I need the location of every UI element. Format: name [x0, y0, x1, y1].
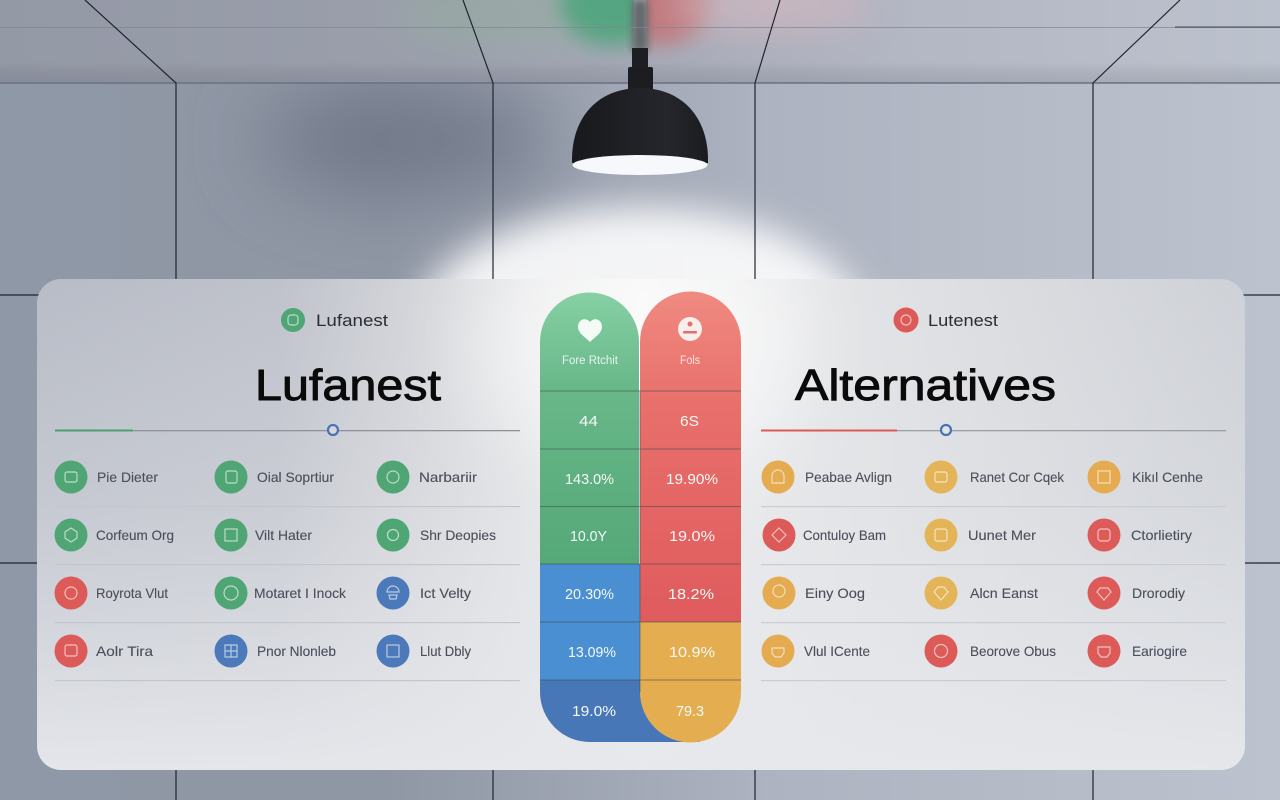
item: Beorove Obus [924, 634, 1056, 668]
item: Vilt Hater: Vilt Hater [255, 527, 312, 543]
ceiling lamp [572, 48, 708, 175]
item: Peabae Avlign: Peabae Avlign [805, 469, 892, 485]
item: Pnor Nlonleb: Pnor Nlonleb [257, 643, 336, 659]
item: Llut Dbly: Llut Dbly [420, 643, 471, 659]
item: Royrota Vlut [54, 576, 168, 610]
column headings [562, 355, 700, 367]
column values: 10.9% [669, 644, 715, 661]
item: Vilt Hater [214, 518, 312, 552]
item: Alcn Eanst: Alcn Eanst [970, 585, 1038, 601]
item: Alcn Eanst [924, 576, 1038, 610]
item: Ict Velty: Ict Velty [420, 585, 471, 601]
item: Ict Velty [376, 576, 471, 610]
item: Ctorlietiry: Ctorlietiry [1131, 527, 1192, 543]
item: Shr Deopies: Shr Deopies [420, 527, 496, 543]
item: Einy Oog: Einy Oog [805, 585, 865, 601]
left header label: Lufanest [316, 312, 388, 330]
lamp light opening [572, 155, 708, 175]
column values: 19.90% [666, 471, 718, 488]
blue cells [540, 564, 700, 742]
item: Contuloy Bam: Contuloy Bam [803, 527, 886, 543]
item: Pie Dieter [54, 460, 158, 494]
item: Ranet Cor Cqek [924, 460, 1065, 494]
item: Llut Dbly [376, 634, 471, 668]
item: Corfeum Org [54, 518, 174, 552]
column values: 44 [579, 413, 598, 430]
left list [54, 460, 520, 681]
item: Vlul ICente: Vlul ICente [804, 643, 870, 659]
item: Kikil Cenhe [1088, 460, 1203, 494]
item: Drorodiy: Drorodiy [1132, 585, 1185, 601]
column values: 19.0% [572, 703, 616, 720]
center comparison columns [540, 292, 741, 742]
item: Ctorlietiry [1088, 518, 1192, 552]
column headings: Fols [680, 355, 700, 367]
column values [565, 413, 718, 720]
column values: 20.30% [565, 586, 614, 603]
yellow cells [640, 622, 741, 742]
item: Ranet Cor Cqek: Ranet Cor Cqek [970, 469, 1065, 485]
item: Drorodiy [1088, 576, 1185, 610]
icon: face [678, 317, 702, 341]
right header label [894, 308, 998, 332]
item: Oial Soprtiur: Oial Soprtiur [257, 469, 334, 485]
item: Motaret I Inock [214, 576, 347, 610]
item: Motaret I Inock: Motaret I Inock [254, 585, 347, 601]
right list [761, 460, 1226, 681]
item: Beorove Obus: Beorove Obus [970, 643, 1056, 659]
red column [640, 292, 741, 622]
item: Vlul ICente [762, 634, 870, 668]
left title: Lufanest [255, 361, 441, 410]
item: Royrota Vlut: Royrota Vlut [96, 585, 168, 601]
item: Narbariir: Narbariir [419, 469, 477, 485]
left header label [281, 308, 388, 332]
green column [540, 292, 639, 564]
column values: 79.3 [676, 703, 704, 720]
column values: 10.0Y [570, 528, 607, 545]
item: Eariogire [1088, 634, 1187, 668]
item: Narbariir [376, 460, 477, 494]
item: Kikil Cenhe: Kikıl Cenhe [1132, 469, 1203, 485]
right title: Alternatives [795, 361, 1056, 410]
right divider [761, 425, 1226, 435]
item: Pnor Nlonleb [214, 634, 336, 668]
left divider [55, 425, 520, 435]
column values: 13.09% [568, 644, 616, 661]
item: Oial Soprtiur [214, 460, 334, 494]
item: Aolr Tira: Aolr Tira [96, 643, 153, 659]
main panel [37, 279, 1245, 770]
item: Uunet Mer [924, 518, 1036, 552]
item: Uunet Mer: Uunet Mer [968, 527, 1036, 543]
item: Einy Oog [762, 576, 865, 610]
item: Peabae Avlign [762, 460, 892, 494]
column values: 143.0% [565, 471, 614, 488]
column values: 18.2% [668, 586, 714, 603]
item: Corfeum Org: Corfeum Org [96, 527, 174, 543]
column headings: Fore Rtchit [562, 355, 619, 367]
column values: 6S [680, 413, 699, 430]
column values: 19.0% [669, 528, 715, 545]
item: Eariogire: Eariogire [1132, 643, 1187, 659]
right header label: Lutenest [928, 312, 998, 330]
item: Shr Deopies [376, 518, 496, 552]
item: Pie Dieter: Pie Dieter [97, 469, 158, 485]
item: Contuloy Bam [762, 518, 886, 552]
item: Aolr Tira [54, 634, 153, 668]
icon: heart [578, 319, 602, 342]
